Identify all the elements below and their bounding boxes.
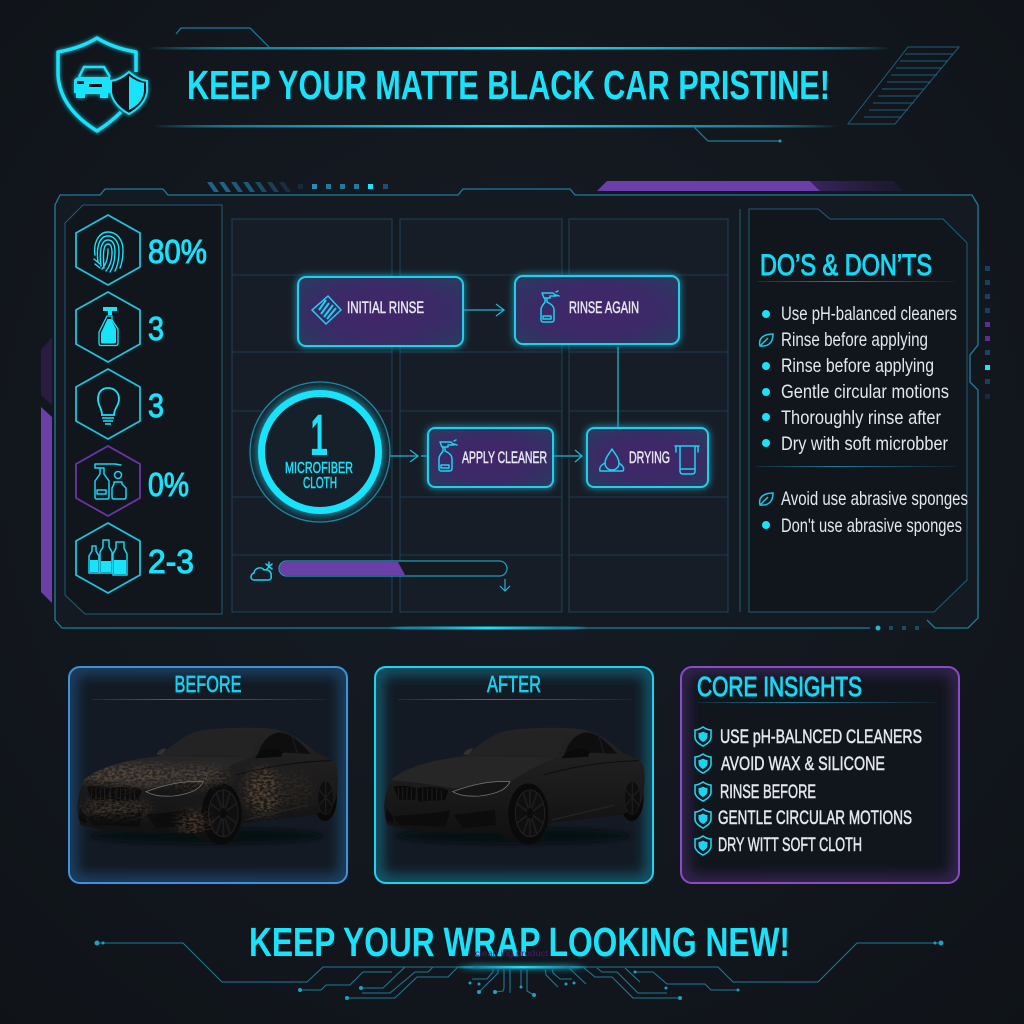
list: don'ts — [760, 488, 968, 537]
stat: 80% fingerprint — [76, 215, 207, 285]
icon: water drop — [600, 449, 624, 471]
stat: 2-3 bottles — [76, 523, 194, 593]
list: do's: Rinse before applying — [781, 329, 928, 351]
stat: 3 spray bottle — [76, 292, 164, 362]
list: do's: Thoroughly rinse after — [781, 407, 941, 429]
list: do's: Gentle circular motions — [781, 381, 949, 403]
list: do's — [760, 303, 957, 455]
progress bar — [251, 561, 510, 591]
step: microfiber cloth ring: CLOTH — [303, 475, 337, 492]
step: rinse again — [515, 276, 679, 344]
step: drying — [587, 428, 708, 487]
step: apply cleaner — [428, 428, 553, 487]
panel: after — [375, 667, 653, 883]
step: initial rinse — [298, 277, 463, 346]
step: drying: DRYING — [629, 449, 670, 467]
step: microfiber cloth ring: MICROFIBER — [285, 460, 353, 477]
insight list: DRY WITT SOFT CLOTH — [718, 835, 862, 856]
panel: key stats — [65, 205, 222, 614]
step: apply cleaner: APPLY CLEANER — [462, 449, 547, 467]
step: microfiber cloth ring — [250, 382, 390, 522]
icon: shield with car — [58, 38, 147, 131]
list: don'ts: Avoid use abrasive sponges — [781, 488, 968, 510]
list: don'ts: Don't use abrasive sponges — [781, 515, 962, 537]
insight list: RINSE BEFORE — [720, 782, 816, 803]
stat: 0% bottles — [76, 446, 189, 516]
insight list: AVOID WAX & SILICONE — [721, 754, 885, 775]
dirty car — [77, 728, 338, 845]
footer microtext: clean ing product — [475, 949, 549, 958]
icon: weather — [251, 562, 272, 580]
main dashboard frame — [55, 189, 990, 630]
list: do's: Rinse before applying — [781, 355, 934, 377]
insight list: USE pH-BALNCED CLEANERS — [720, 727, 922, 748]
list: do's: Dry with soft microbber — [781, 433, 948, 455]
side purple accents — [41, 337, 52, 603]
insight list: GENTLE CIRCULAR MOTIONS — [718, 808, 912, 829]
top status strips — [207, 181, 903, 192]
panel: before — [69, 667, 347, 883]
panel: core insights — [681, 667, 959, 883]
list: do's: Use pH-balanced cleaners — [781, 303, 957, 325]
icon: wet cloth — [312, 296, 341, 324]
stat: 3 spray bottle: 3 — [148, 310, 164, 347]
stat: 0% bottles: 0% — [148, 466, 189, 503]
panel: after: AFTER — [487, 671, 541, 697]
stat: 3 light bulb — [76, 369, 164, 439]
header banner — [58, 28, 959, 142]
stat: 3 light bulb: 3 — [148, 387, 164, 424]
clean car — [384, 728, 645, 845]
heading: CORE INSIGHTS — [697, 671, 862, 702]
stat: 2-3 bottles: 2-3 — [148, 543, 194, 580]
heading: DO’S & DON’TS — [760, 249, 932, 282]
footer tagline: KEEP YOUR WRAP LOOKING NEW! — [249, 919, 790, 965]
decorative hatch parallelogram — [848, 47, 959, 124]
insight list — [695, 727, 922, 856]
panel: do's and don'ts — [740, 209, 968, 612]
title: KEEP YOUR MATTE BLACK CAR PRISTINE! — [187, 62, 830, 108]
flow arrows — [375, 304, 618, 462]
process grid — [232, 219, 728, 612]
panel: before: BEFORE — [174, 671, 242, 697]
step: microfiber cloth ring: 1 — [310, 403, 328, 466]
icon: towel — [675, 446, 699, 474]
step: rinse again: RINSE AGAIN — [569, 299, 639, 317]
stat: 80% fingerprint: 80% — [148, 233, 207, 270]
step: initial rinse: INITIAL RINSE — [347, 299, 424, 317]
footer circuit decoration — [94, 940, 944, 1000]
